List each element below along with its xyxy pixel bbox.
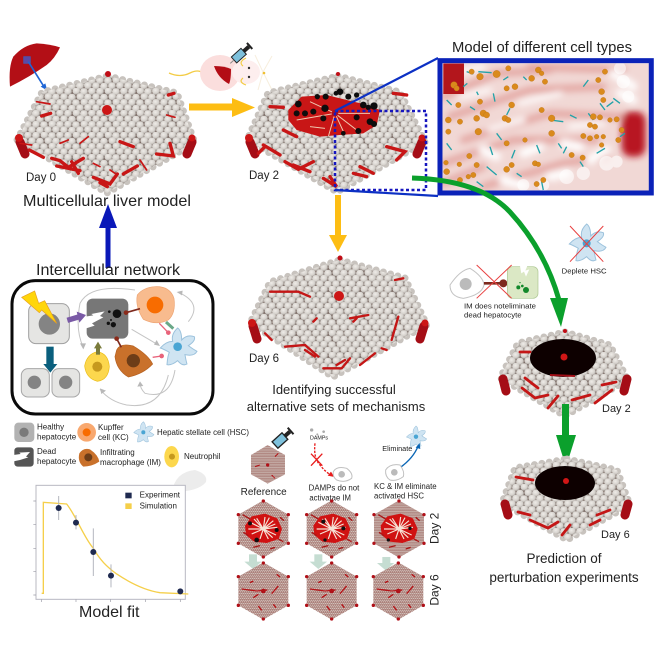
legend: healthy hepatocyte [14, 423, 34, 442]
arrow: green curve to perturbation [412, 178, 568, 327]
inhibitions [153, 322, 173, 358]
experiment points [56, 505, 183, 594]
IM acts on dead cell [114, 336, 121, 347]
heading: prediction of perturbation experiments [489, 551, 639, 585]
arrow: network to model [99, 204, 117, 268]
icon: eliminate HSC: Eliminate [382, 446, 412, 453]
heading: model of different cell types: Model of different cell types [452, 40, 632, 56]
chart: model fit [33, 485, 188, 602]
orange cells [444, 66, 624, 187]
liver model: perturbed day 6 [502, 459, 630, 540]
legend: neutrophil [164, 446, 179, 467]
teal cells [447, 72, 625, 190]
tissue streaks [443, 67, 646, 187]
text: IM does not eliminate dead hepatocyte: dead hepatocyte [464, 311, 522, 320]
label: day 6 perturbed: Day 6 [601, 529, 630, 541]
icon: syringe [272, 427, 294, 448]
label: day 2: Day 2 [249, 170, 279, 182]
legend: Dead [37, 447, 56, 456]
legend: Hepatic stellate cell (HSC) [157, 428, 249, 437]
legend: hepatocyte [37, 432, 77, 442]
liver model: perturbed day 2 [500, 329, 628, 416]
arrow: perturbed day 2 to day 6 [556, 404, 576, 467]
legend: Infiltrating [100, 448, 135, 457]
kupffer cell [137, 287, 174, 323]
reference hexagon [251, 445, 285, 484]
text: IM does not eliminate dead hepatocyte: IM does noteliminate [464, 301, 536, 310]
heading: identifying alternative mechanisms [247, 382, 426, 414]
panel: intercellular network diagram [12, 281, 213, 414]
plot frame [36, 485, 185, 599]
chart legend: Experiment [140, 490, 181, 499]
KC acts on dead cell [124, 309, 140, 315]
text: DAMPs do not activate IM: activatae IM [309, 493, 351, 502]
text: KC and IM eliminate activated HSC: activated HSC [374, 491, 424, 500]
legend: infiltrating macrophage [79, 449, 99, 467]
liver model: day 2 [245, 72, 426, 192]
callout: zoom region marker [335, 58, 438, 196]
neutrophil [85, 352, 109, 381]
legend: kupffer cell [77, 423, 96, 442]
heading: intercellular network: Intercellular network [36, 262, 181, 279]
text: deplete HSC: Deplete HSC [562, 266, 607, 275]
dead hepatocyte [85, 299, 128, 339]
heading: model fit: Model fit [79, 604, 140, 621]
chart legend: Simulation [140, 502, 177, 511]
row labels: Day 6 [427, 574, 441, 606]
icon: IM cannot eliminate dead hepatocyte [450, 265, 538, 298]
legend [13, 422, 249, 467]
legend: Kupffer [98, 423, 124, 432]
decorative faded blob [172, 470, 206, 492]
label: day 6: Day 6 [249, 353, 279, 365]
panel: alternative mechanisms grid [237, 426, 441, 621]
day 6 models [237, 561, 425, 621]
icon: liver with sampled region [10, 43, 60, 91]
simulation curve [42, 502, 188, 594]
heading: identifying alternative mechanisms: alternative sets of mechanisms [247, 399, 426, 414]
icon: DAMPs blocked: DAMPs [310, 436, 328, 442]
arrow: neutrophil to dead cell [94, 342, 102, 355]
legend: Healthy [37, 422, 64, 432]
text: DAMPs do not activate IM: DAMPs do not [309, 484, 360, 493]
label: day 0: Day 0 [26, 172, 56, 184]
icon: lightning injury [22, 291, 57, 323]
legend: hepatocyte [37, 457, 77, 466]
liver model: day 6 [248, 256, 428, 377]
text: IM does not eliminate dead hepatocyte [464, 301, 536, 320]
arrow: day 0 to day 2 [189, 98, 255, 117]
heading: multicellular liver model: Multicellular liver model [23, 193, 191, 210]
text: KC and IM eliminate activated HSC: KC & IM eliminate [374, 482, 437, 491]
legend: dead hepatocyte [13, 447, 34, 467]
healthy hepatocyte [29, 304, 69, 344]
error bars [59, 496, 111, 587]
daughter hepatocytes [21, 369, 80, 397]
heading: prediction of perturbation experiments: perturbation experiments [489, 570, 639, 585]
legend: cell (KC) [98, 433, 129, 442]
label: day 2 perturbed: Day 2 [602, 403, 631, 415]
icon: eliminate HSC [382, 426, 427, 480]
icon: mouse with injection [169, 42, 272, 91]
text: KC and IM eliminate activated HSC [374, 482, 437, 500]
chart legend [125, 490, 181, 511]
infiltrating macrophage [115, 345, 153, 377]
day 2 models [237, 499, 426, 559]
legend: Neutrophil [184, 452, 221, 461]
hepatic stellate cell [160, 328, 197, 365]
row labels [427, 512, 441, 606]
arrows: day 2 to day 6 [244, 554, 394, 570]
grey regulation arrows [78, 288, 194, 406]
perturbation icons [450, 224, 607, 320]
icon: DAMPs blocked [310, 428, 352, 481]
heading: prediction of perturbation experiments: Prediction of [526, 551, 602, 566]
legend: macrophage (IM) [100, 458, 161, 467]
arrow: proliferation [43, 347, 57, 373]
arrow: day 2 to day 6 [329, 195, 347, 252]
legend: hepatic stellate cell [134, 422, 154, 442]
panel: zoomed cell types [440, 61, 651, 193]
liver model: day 0 [15, 71, 196, 193]
arrow: injury to death [67, 312, 86, 323]
icon: depleted HSC [569, 224, 606, 262]
label: reference: Reference [241, 487, 287, 498]
row labels: Day 2 [427, 512, 441, 544]
heading: identifying alternative mechanisms: Identifying successful [272, 382, 396, 397]
text: DAMPs do not activate IM [309, 484, 360, 502]
